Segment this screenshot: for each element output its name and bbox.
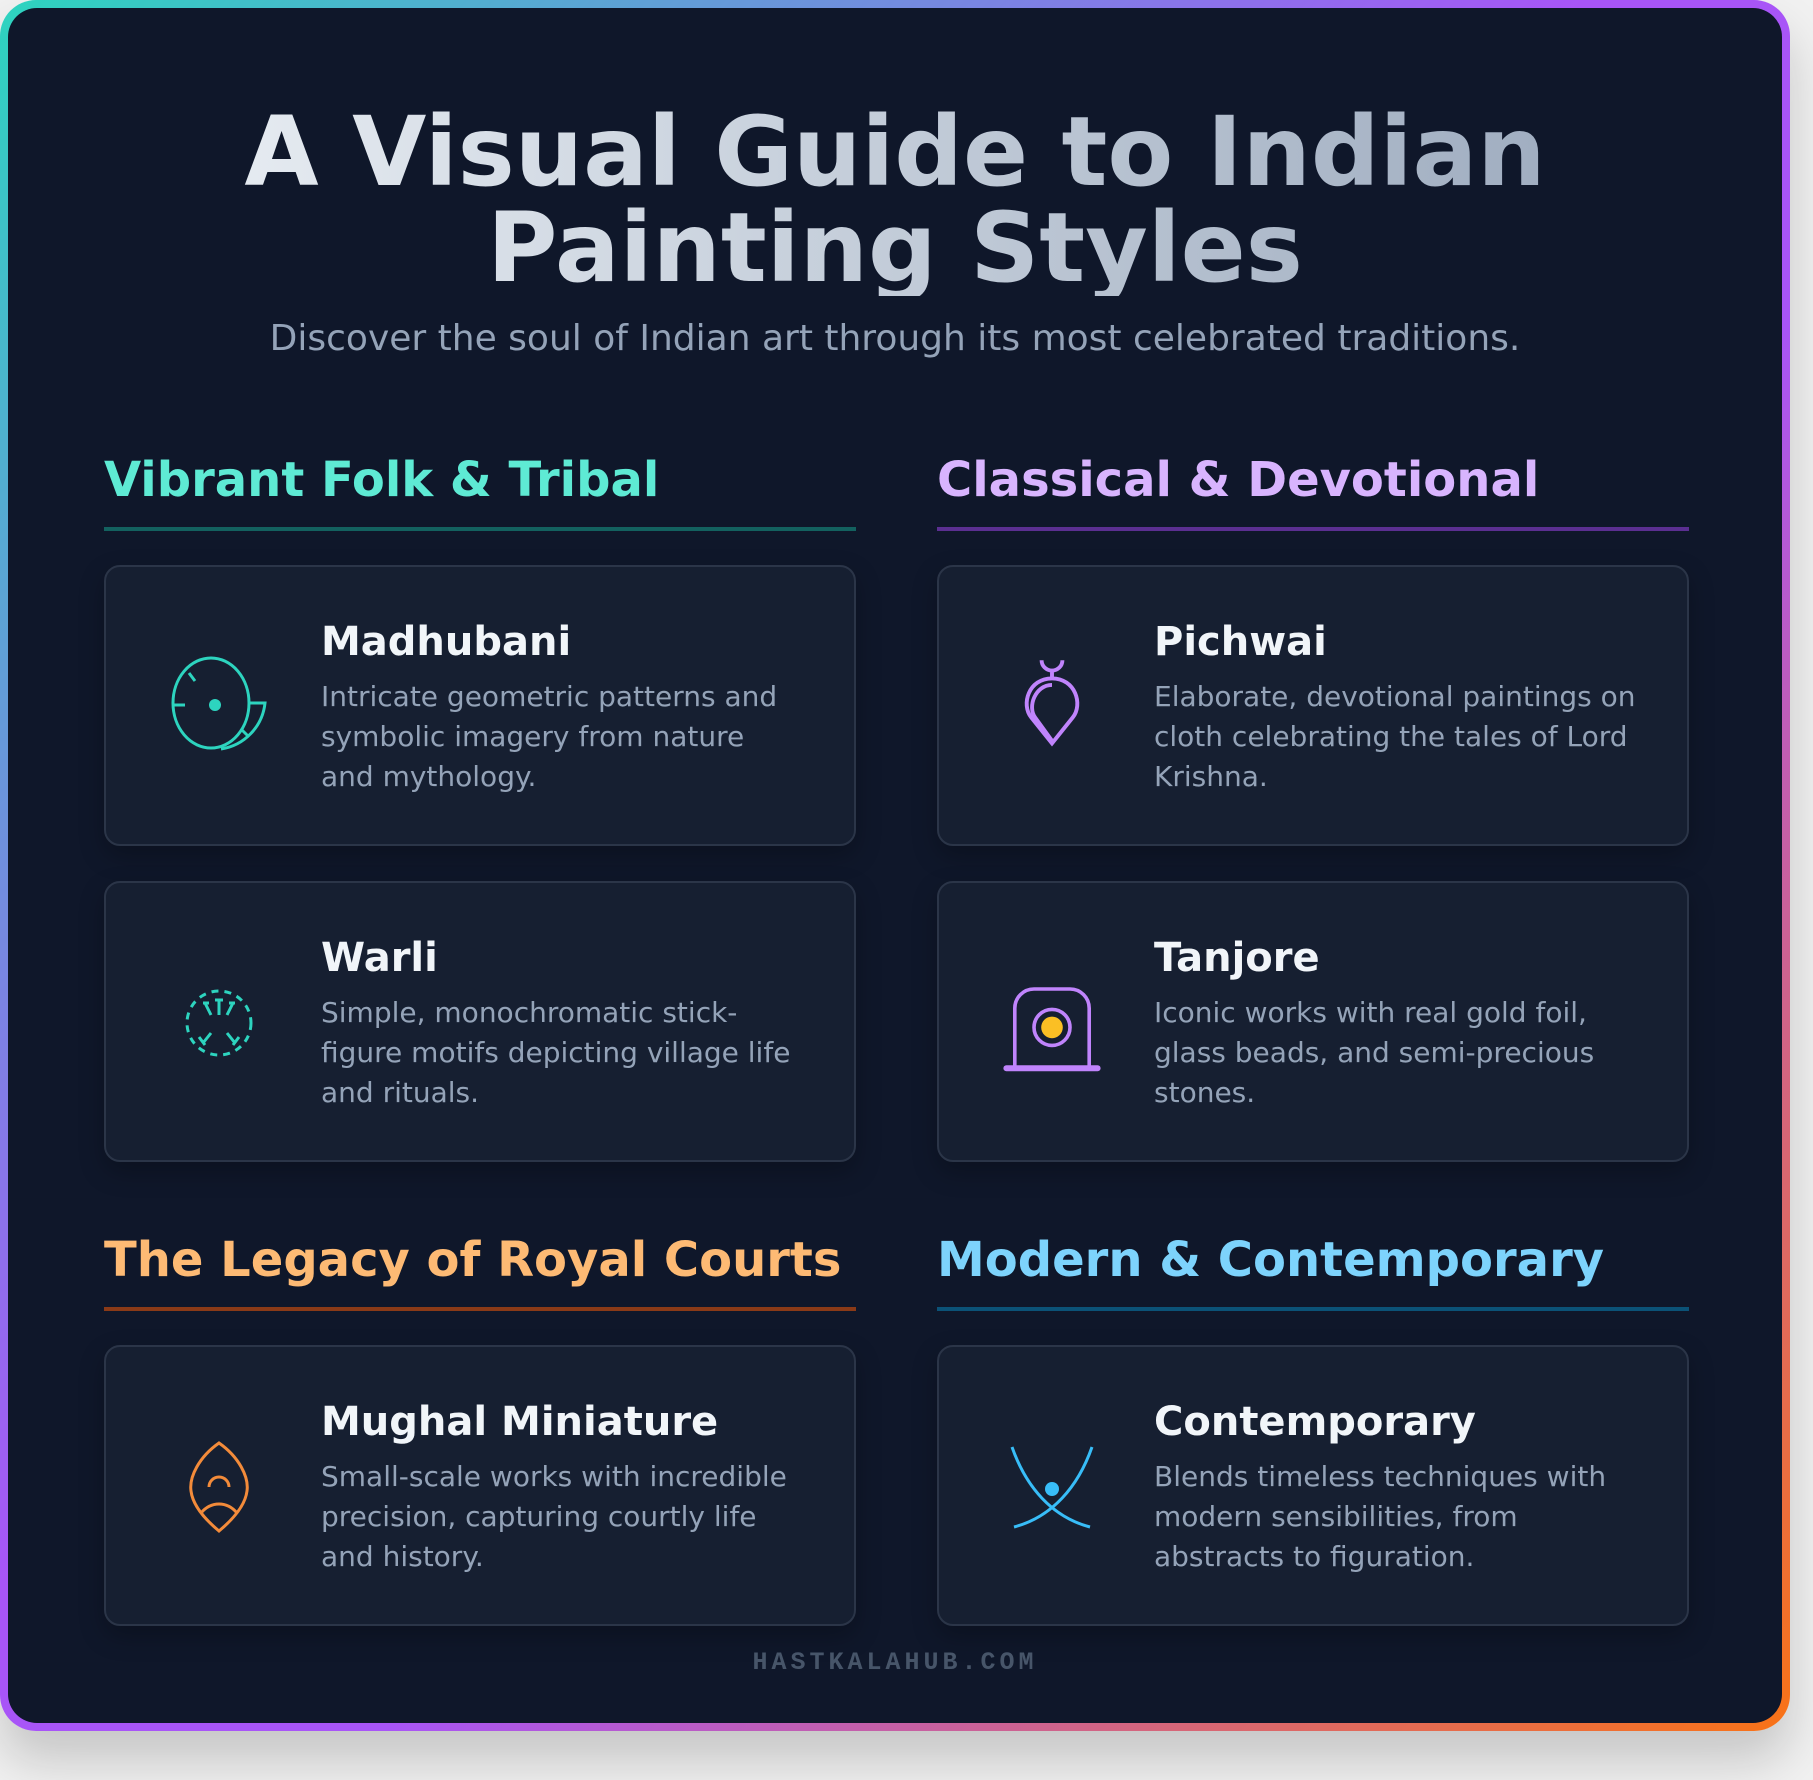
icon: Contemporary curves: [1010, 1446, 1094, 1528]
card: Pichwai: [937, 565, 1689, 846]
icon: Pichwai pendant: [1024, 660, 1080, 746]
card: Madhubani: Intricate geometric patterns and symbolic imagery from nature: [321, 680, 777, 753]
icon: Tanjore frame with gem: [1003, 987, 1101, 1072]
heading: The Legacy of Royal Courts: The Legacy of Royal Courts: [104, 1232, 841, 1288]
card: Madhubani: [104, 565, 856, 846]
card: Tanjore: [937, 881, 1689, 1162]
card: Madhubani: and mythology.: [321, 760, 536, 793]
card: Warli: Simple, monochromatic stick-figure motifs depicting village life and rituals.: [321, 996, 790, 1109]
card: Mughal Miniature: Mughal Miniature: [321, 1399, 718, 1445]
heading: Vibrant Folk & Tribal: Vibrant Folk & Tribal: [104, 452, 659, 508]
heading: Classical & Devotional: Classical & Devotional: [937, 452, 1539, 508]
title: A Visual Guide to Indian: [244, 96, 1546, 208]
title: Painting Styles: [487, 192, 1303, 304]
card: Mughal Miniature: Small-scale works with incredible precision, capturing courtly life and history.: [321, 1460, 787, 1573]
title: [8, 104, 1782, 296]
icon: Warli circle: [186, 990, 252, 1056]
heading: Modern & Contemporary: Modern & Contemporary: [937, 1232, 1604, 1288]
card: Tanjore: Tanjore: [1154, 935, 1320, 981]
icon: Madhubani fish: [172, 656, 267, 750]
icon: Mughal leaf: [189, 1441, 249, 1533]
subtitle: Discover the soul of Indian art through its most celebrated traditions.: [270, 318, 1520, 359]
card: Pichwai: Pichwai: [1154, 619, 1327, 665]
card: Contemporary: Blends timeless techniques with modern sensibilities, from abstracts to figuration.: [1154, 1460, 1606, 1573]
card: Tanjore: Iconic works with real gold foil, glass beads, and semi-precious stones.: [1154, 996, 1594, 1109]
footer: HASTKALAHUB.COM: [752, 1648, 1038, 1677]
card: Mughal Miniature: [104, 1345, 856, 1626]
card: Contemporary: [937, 1345, 1689, 1626]
card: Warli: Warli: [321, 935, 438, 981]
card: Contemporary: Contemporary: [1154, 1399, 1476, 1445]
card: Pichwai: Elaborate, devotional paintings on cloth celebrating the tales of Lord Krishna.: [1154, 680, 1635, 793]
card: Madhubani: Madhubani: [321, 619, 571, 665]
card: Warli: [104, 881, 856, 1162]
